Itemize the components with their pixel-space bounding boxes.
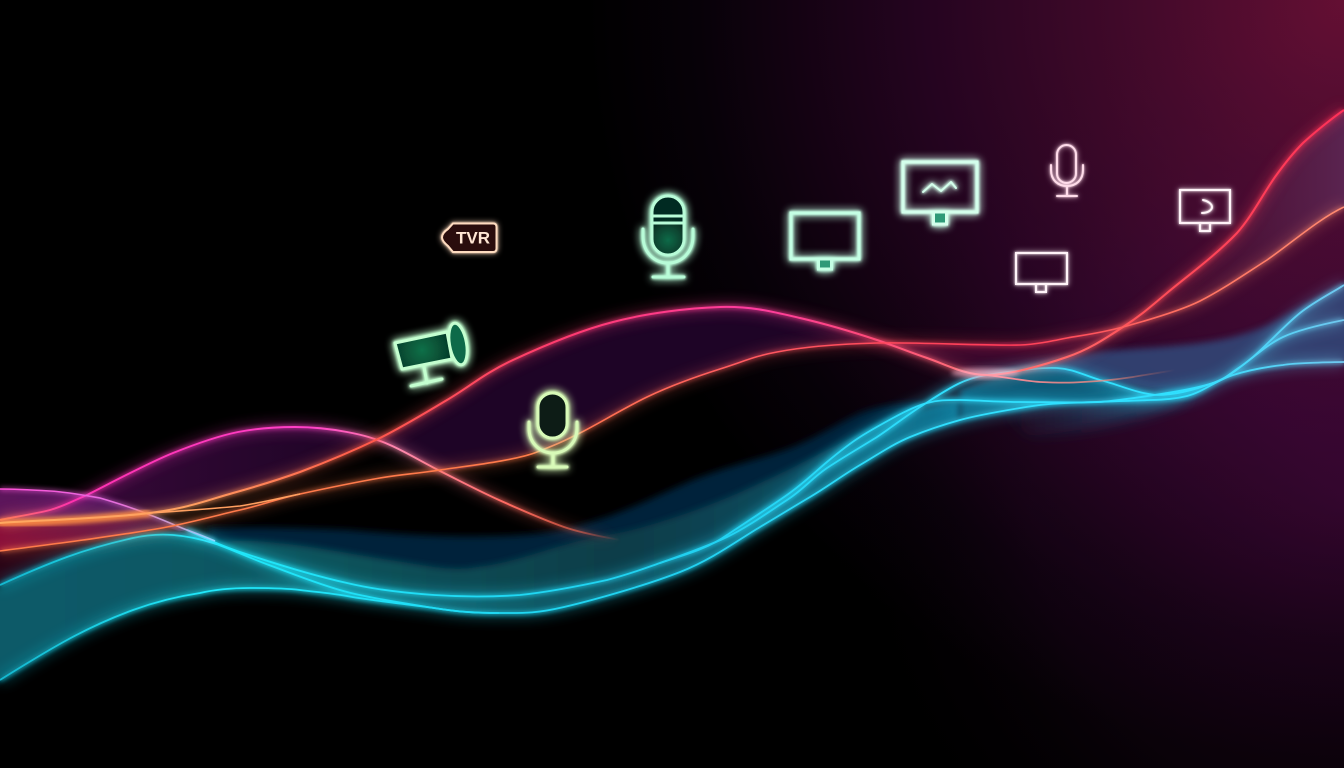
- TVR label: TVR: [456, 228, 490, 248]
- wave: cyan ribbon lines: [0, 285, 1344, 680]
- wave: translucent warm fills: [0, 110, 1344, 585]
- icon: screen with trend line: [903, 162, 977, 224]
- wave: blue and teal ribbon fills: [0, 270, 1344, 700]
- icon: projector: [395, 322, 470, 386]
- icon: blank screen left: [791, 213, 859, 269]
- icon: large microphone: [643, 196, 693, 277]
- icon: screen with arc: [1180, 190, 1230, 231]
- icon: TVR badge: [442, 224, 496, 252]
- icon: blank screen right: [1016, 253, 1067, 292]
- icon: thin microphone: [1051, 145, 1083, 196]
- wave: magenta lines: [0, 370, 1175, 541]
- wave: red and orange lines: [0, 110, 1344, 551]
- icon: small microphone: [529, 393, 577, 467]
